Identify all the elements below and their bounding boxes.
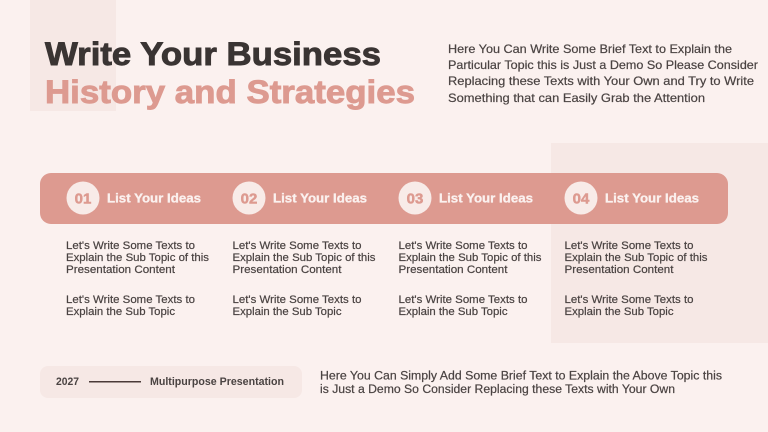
intro paragraph: Particular Topic this is Just a Demo So Please Consider bbox=[448, 58, 758, 72]
ideas band bbox=[40, 173, 728, 224]
year: 2027 bbox=[56, 376, 79, 388]
intro paragraph: Replacing these Texts with Your Own and Try to Write bbox=[448, 74, 754, 88]
footer paragraph: Here You Can Simply Add Some Brief Text to Explain the Above Topic this bbox=[320, 370, 722, 382]
connector line bbox=[89, 381, 141, 382]
intro paragraph bbox=[448, 42, 758, 105]
badge 01: 01 bbox=[75, 190, 91, 208]
text block 01: Let's Write Some Texts to bbox=[66, 240, 195, 252]
title: Write Your Business bbox=[45, 36, 381, 72]
text block 02: Let's Write Some Texts to bbox=[232, 294, 362, 306]
text block 02: Explain the Sub Topic of this bbox=[232, 252, 376, 264]
text block 01: Explain the Sub Topic of this bbox=[66, 252, 210, 264]
text block 04: Explain the Sub Topic of this bbox=[564, 252, 708, 264]
decorative panel: top left bbox=[30, 0, 116, 111]
badge 03: 03 bbox=[407, 190, 423, 208]
text block 02: Presentation Content bbox=[232, 264, 342, 276]
badge 04: 04 bbox=[573, 190, 590, 208]
text block 02 bbox=[232, 240, 376, 318]
badge 04 bbox=[564, 182, 598, 214]
column 4 bbox=[564, 182, 708, 318]
text block 03: Let's Write Some Texts to bbox=[398, 294, 528, 306]
heading 04: List Your Ideas bbox=[605, 190, 699, 206]
text block 01: Explain the Sub Topic bbox=[66, 306, 176, 318]
decorative panel: right bbox=[551, 143, 768, 343]
column 2 bbox=[232, 182, 376, 318]
heading 01: List Your Ideas bbox=[107, 190, 201, 206]
pill label: Multipurpose Presentation bbox=[150, 376, 284, 388]
intro paragraph: Something that can Easily Grab the Attention bbox=[448, 91, 705, 105]
intro paragraph: Here You Can Write Some Brief Text to Explain the bbox=[448, 42, 732, 56]
title bbox=[45, 36, 415, 110]
text block 03: Presentation Content bbox=[398, 264, 508, 276]
title: History and Strategies bbox=[45, 74, 415, 110]
badge 01 bbox=[66, 182, 100, 214]
footer pill bbox=[40, 366, 302, 398]
badge 02 bbox=[232, 182, 266, 214]
text block 03: Explain the Sub Topic of this bbox=[398, 252, 542, 264]
text block 04: Explain the Sub Topic bbox=[564, 306, 674, 318]
text block 04: Let's Write Some Texts to bbox=[564, 294, 694, 306]
text block 02: Explain the Sub Topic bbox=[232, 306, 342, 318]
badge 03 bbox=[398, 182, 432, 214]
badge 02: 02 bbox=[241, 190, 257, 208]
footer paragraph bbox=[320, 370, 722, 396]
text block 03 bbox=[398, 240, 542, 318]
text block 03: Explain the Sub Topic bbox=[398, 306, 508, 318]
text block 01 bbox=[66, 240, 210, 318]
heading 03: List Your Ideas bbox=[439, 190, 533, 206]
heading 02: List Your Ideas bbox=[273, 190, 367, 206]
text block 02: Let's Write Some Texts to bbox=[232, 240, 362, 252]
footer paragraph: is Just a Demo So Consider Replacing these Texts with Your Own bbox=[320, 384, 675, 396]
text block 01: Let's Write Some Texts to bbox=[66, 294, 195, 306]
text block 04: Let's Write Some Texts to bbox=[564, 240, 694, 252]
column 3 bbox=[398, 182, 542, 318]
column 1 bbox=[66, 182, 210, 318]
text block 03: Let's Write Some Texts to bbox=[398, 240, 528, 252]
text block 04: Presentation Content bbox=[564, 264, 674, 276]
text block 04 bbox=[564, 240, 708, 318]
text block 01: Presentation Content bbox=[66, 264, 175, 276]
